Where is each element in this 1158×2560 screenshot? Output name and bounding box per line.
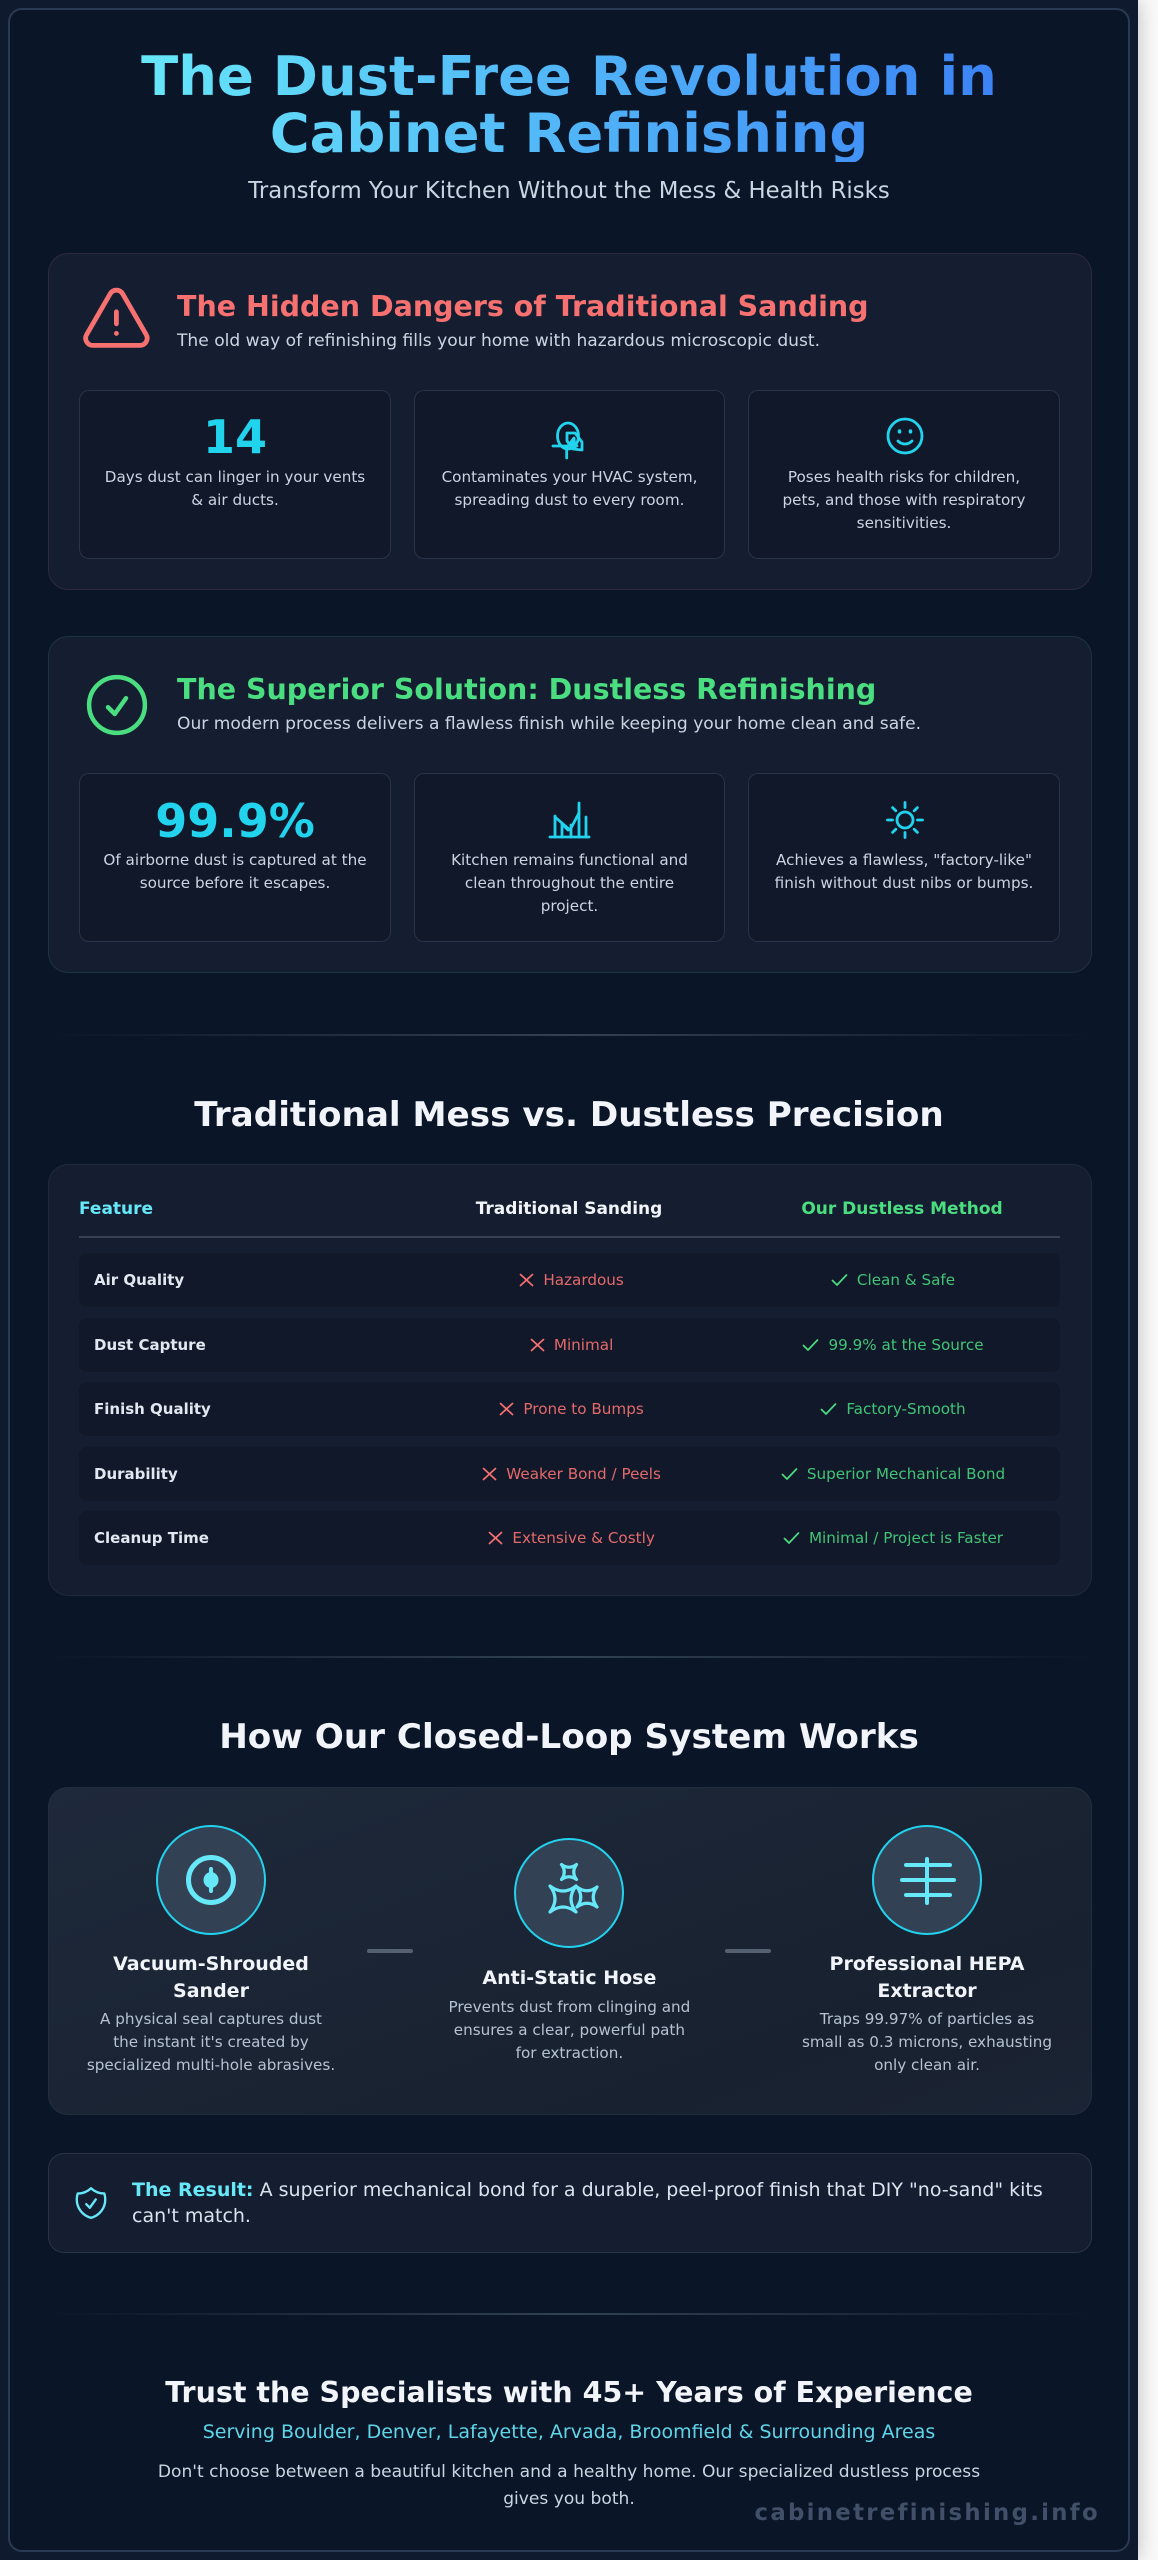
text: superior solution intro: Our modern process delivers a flawless finish while keeping your home clean and safe. bbox=[177, 714, 921, 734]
card text bbox=[442, 468, 697, 509]
icon: anti-static sparkles bbox=[514, 1838, 624, 1948]
panel: superior solution bbox=[48, 636, 1092, 973]
card text: Poses health risks for children, bbox=[788, 468, 1020, 486]
step title: Sander bbox=[173, 1980, 249, 2002]
card text bbox=[782, 468, 1025, 532]
icon: warning triangle bbox=[83, 288, 150, 348]
feature label: Durability bbox=[94, 1464, 178, 1482]
card text: Contaminates your HVAC system, bbox=[442, 468, 697, 486]
result text: The Result: A superior mechanical bond for a durable, peel-proof finish that DIY "no-sand" kits bbox=[132, 2178, 1043, 2200]
dustless value: Clean & Safe bbox=[857, 1271, 955, 1289]
heading: superior solution: The Superior Solution: Dustless Refinishing bbox=[177, 673, 876, 706]
dustless value: Factory-Smooth bbox=[846, 1400, 966, 1418]
icon: kitchen chart bbox=[548, 802, 590, 838]
icon: shield check bbox=[76, 2187, 106, 2219]
title bbox=[130, 48, 1008, 162]
step title: Extractor bbox=[877, 1980, 977, 2002]
panel: hidden dangers bbox=[48, 253, 1092, 590]
connector 2 bbox=[725, 1949, 771, 1953]
step title bbox=[113, 1953, 309, 2002]
card: factory finish bbox=[748, 773, 1060, 942]
card text bbox=[451, 851, 688, 915]
panel: process steps bbox=[48, 1787, 1092, 2115]
title: The Dust-Free Revolution in bbox=[141, 45, 997, 108]
stat: 99.9%: 99.9% bbox=[155, 794, 315, 848]
step description: small as 0.3 microns, exhausting bbox=[802, 2033, 1052, 2051]
card text bbox=[103, 851, 367, 892]
step description bbox=[448, 1998, 690, 2062]
step description: only clean air. bbox=[874, 2056, 980, 2074]
icon: HEPA filter bbox=[872, 1825, 982, 1935]
service areas: Serving Boulder, Denver, Lafayette, Arvada, Broomfield & Surrounding Areas bbox=[203, 2421, 935, 2443]
card: 99.9% bbox=[79, 773, 391, 942]
closing text: Don't choose between a beautiful kitchen and a healthy home. Our specialized dustless process bbox=[158, 2462, 980, 2482]
card text: finish without dust nibs or bumps. bbox=[775, 874, 1033, 892]
panel: comparison table bbox=[48, 1164, 1092, 1596]
step 2: hose bbox=[448, 1838, 690, 2062]
title: Cabinet Refinishing bbox=[270, 102, 868, 165]
step description: A physical seal captures dust bbox=[100, 2010, 322, 2028]
feature label: Finish Quality bbox=[94, 1400, 211, 1418]
card: health risks bbox=[748, 390, 1060, 559]
footer heading: Trust the Specialists with 45+ Years of Experience bbox=[165, 2376, 973, 2409]
step description: Traps 99.97% of particles as bbox=[820, 2010, 1034, 2028]
icon: HVAC contamination bbox=[552, 422, 584, 460]
traditional value: Minimal bbox=[554, 1336, 613, 1354]
card text: source before it escapes. bbox=[140, 874, 330, 892]
row: finish quality bbox=[79, 1382, 1060, 1436]
step 1: sander bbox=[87, 1825, 335, 2074]
text: hidden dangers intro: The old way of refinishing fills your home with hazardous microscopic dust. bbox=[177, 331, 820, 351]
heading: closed-loop system: How Our Closed-Loop System Works bbox=[219, 1717, 919, 1757]
card text: Achieves a flawless, "factory-like" bbox=[776, 851, 1032, 869]
step title: Vacuum-Shrouded bbox=[113, 1953, 309, 1975]
result text bbox=[132, 2178, 1043, 2227]
card text bbox=[774, 851, 1033, 892]
step description: for extraction. bbox=[516, 2044, 623, 2062]
row: cleanup time bbox=[79, 1511, 1060, 1565]
card: HVAC bbox=[414, 390, 725, 559]
step title bbox=[830, 1953, 1024, 2002]
card text: spreading dust to every room. bbox=[455, 491, 684, 509]
row: dust capture bbox=[79, 1318, 1060, 1372]
step description bbox=[802, 2010, 1052, 2074]
card text: project. bbox=[541, 897, 598, 915]
card: 14 days bbox=[79, 390, 391, 559]
closing text bbox=[158, 2462, 980, 2508]
card text: pets, and those with respiratory bbox=[782, 491, 1025, 509]
callout: the result bbox=[48, 2153, 1092, 2253]
traditional value: Prone to Bumps bbox=[523, 1400, 644, 1418]
feature label: Dust Capture bbox=[94, 1336, 206, 1354]
step description: Prevents dust from clinging and bbox=[448, 1998, 690, 2016]
heading: hidden dangers: The Hidden Dangers of Traditional Sanding bbox=[177, 290, 869, 323]
feature label: Cleanup Time bbox=[94, 1529, 209, 1547]
step title: Professional HEPA bbox=[830, 1953, 1024, 1975]
subtitle: Transform Your Kitchen Without the Mess & Health Risks bbox=[248, 178, 890, 204]
step 3: extractor bbox=[802, 1825, 1052, 2074]
dustless value: Minimal / Project is Faster bbox=[809, 1529, 1003, 1547]
column: feature: Feature bbox=[79, 1199, 153, 1219]
card text: & air ducts. bbox=[191, 491, 279, 509]
icon: sun bbox=[886, 801, 924, 839]
card text: sensitivities. bbox=[857, 514, 951, 532]
feature label: Air Quality bbox=[94, 1271, 184, 1289]
heading: comparison: Traditional Mess vs. Dustless Precision bbox=[194, 1095, 944, 1135]
step description: specialized multi-hole abrasives. bbox=[87, 2056, 335, 2074]
column: dustless: Our Dustless Method bbox=[801, 1199, 1003, 1219]
card text: Days dust can linger in your vents bbox=[105, 468, 365, 486]
icon: check circle bbox=[86, 674, 148, 736]
card text: Of airborne dust is captured at the bbox=[103, 851, 367, 869]
connector 1 bbox=[367, 1949, 413, 1953]
icon: smiley face bbox=[886, 418, 924, 454]
row: air quality bbox=[79, 1253, 1060, 1307]
step title: Anti-Static Hose bbox=[482, 1966, 656, 1988]
card text: Kitchen remains functional and bbox=[451, 851, 688, 869]
step description bbox=[87, 2010, 335, 2074]
row: durability bbox=[79, 1446, 1060, 1500]
dustless value: 99.9% at the Source bbox=[828, 1336, 984, 1354]
column: traditional: Traditional Sanding bbox=[476, 1199, 662, 1219]
traditional value: Hazardous bbox=[543, 1271, 624, 1289]
traditional value: Weaker Bond / Peels bbox=[506, 1464, 661, 1482]
stat: 14: 14 bbox=[203, 410, 267, 464]
card: functional kitchen bbox=[414, 773, 725, 942]
result text: can't match. bbox=[132, 2205, 251, 2227]
closing text: gives you both. bbox=[503, 2488, 635, 2508]
table header bbox=[79, 1194, 1060, 1238]
icon: sander bbox=[156, 1825, 266, 1935]
dustless value: Superior Mechanical Bond bbox=[807, 1464, 1005, 1482]
card text bbox=[105, 468, 365, 509]
traditional value: Extensive & Costly bbox=[512, 1529, 655, 1547]
step description: the instant it's created by bbox=[113, 2033, 309, 2051]
step description: ensures a clear, powerful path bbox=[454, 2021, 685, 2039]
watermark: cabinetrefinishing.info bbox=[755, 2500, 1100, 2526]
card text: clean throughout the entire bbox=[465, 874, 674, 892]
